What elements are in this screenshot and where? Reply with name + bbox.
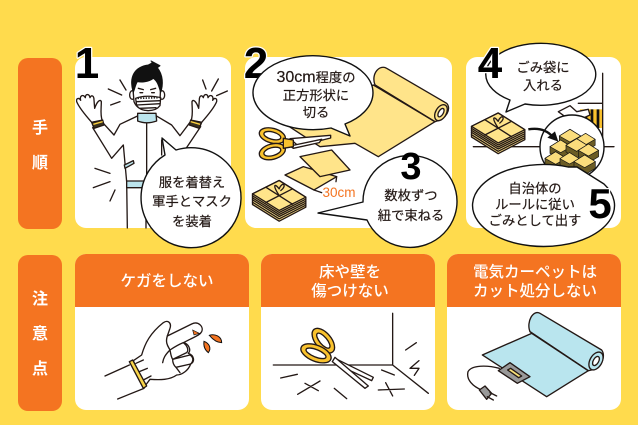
speech bubble: step 1: [141, 138, 241, 248]
card: do not cut electric carpet: [447, 254, 621, 410]
speech bubble: step 5: [473, 164, 615, 246]
illustration: tied bundle: [252, 180, 306, 221]
label: 注意点: [18, 255, 62, 411]
illustration: injured gloved hand: [105, 321, 222, 399]
illustration: scissors: [257, 125, 331, 163]
card: do not cut electric carpet: 電気カーペットは: [473, 263, 597, 281]
panel: step 1: [75, 39, 241, 248]
card: no injury: ケガをしない: [120, 272, 214, 290]
card: no injury: [75, 254, 249, 410]
number 1: 1: [75, 39, 99, 88]
label: 注意点: 点: [32, 359, 48, 378]
speech bubble: step 4: ごみ袋に: [516, 60, 570, 75]
speech bubble: step 3: 数枚ずつ: [384, 188, 438, 203]
number 2: 2: [244, 39, 268, 88]
speech bubble: step 5: ルールに従い: [495, 197, 575, 212]
card: do not damage floor and walls: [261, 254, 435, 410]
card: do not cut electric carpet: カット処分しない: [473, 282, 597, 300]
illustration: roll of carpet: [288, 67, 450, 157]
speech bubble: step 1: 軍手とマスク: [152, 194, 232, 209]
speech bubble: step 2: 正方形状に: [283, 88, 349, 103]
label: 手順: [18, 58, 62, 229]
speech bubble: step 3: [318, 155, 457, 247]
illustration: collection spot: [473, 73, 614, 147]
number 5: 5: [588, 180, 612, 227]
card: do not damage floor and walls: 傷つけない: [311, 282, 389, 300]
speech bubble: step 1: 服を着替え: [159, 174, 225, 190]
number 3: 3: [400, 146, 422, 188]
speech bubble: step 1: を装着: [172, 213, 212, 229]
arrow: [528, 129, 558, 142]
label: 手順: 順: [32, 154, 48, 172]
speech bubble: step 4: [486, 43, 596, 112]
speech bubble: step 2: [253, 56, 373, 136]
label: 注意点: 注: [32, 290, 48, 308]
panel: step 2 and 3: [244, 39, 457, 247]
speech bubble: step 5: ごみとして出す: [489, 213, 581, 228]
illustration: circle with stacked bundles: [540, 115, 604, 179]
speech bubble: step 2: 30cm程度の: [276, 69, 356, 86]
speech bubble: step 3: 紐で束ねる: [378, 208, 444, 223]
speech bubble: step 5: 自治体の: [508, 181, 562, 196]
card: do not damage floor and walls: 床や壁を: [319, 263, 381, 281]
illustration: cut squares: [285, 150, 350, 193]
speech bubble: step 4: 入れる: [523, 78, 563, 93]
label: 注意点: 意: [32, 325, 48, 343]
number 4: 4: [478, 39, 503, 88]
speech bubble: step 2: 切る: [303, 105, 329, 120]
panel: step 4 and 5: [466, 39, 621, 246]
label: 手順: 手: [32, 118, 48, 137]
illustration: bundle: [472, 113, 525, 154]
illustration: person with mask and gloves: [77, 61, 227, 228]
dimension label: 30cm: [322, 185, 356, 200]
illustration: scissors on scratched floor: [273, 313, 428, 399]
illustration: electric carpet with plug: [468, 313, 606, 400]
